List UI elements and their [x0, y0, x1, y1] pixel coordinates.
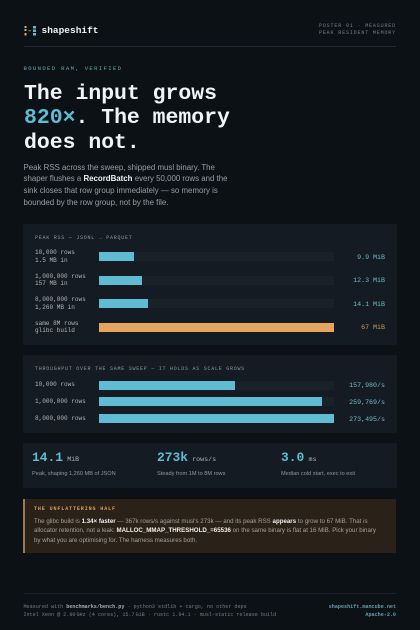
row: 1,000,000 rows [35, 397, 385, 406]
row: 1,000,000 rows: 1,000,000 rows 157 MB in [35, 272, 86, 287]
panel title: PEAK RSS — JSONL → PARQUET [35, 234, 133, 240]
intro paragraph: Peak RSS across the sweep, shipped musl binary. The [24, 162, 215, 172]
poster meta: POSTER 01 · MEASURED PEAK RESIDENT MEMORY [319, 22, 396, 36]
row: 1,000,000 rows: 12.3 MiB [353, 276, 385, 284]
panel: peak RSS chart [23, 224, 397, 344]
callout title: THE UNFLATTERING HALF [34, 506, 116, 512]
row: 8,000,000 rows: 14.1 MiB [353, 300, 385, 308]
row: 10,000 rows: 10,000 rows 1.5 MB in [35, 249, 75, 264]
eyebrow: BOUNDED RAM, VERIFIED [24, 65, 122, 72]
brand name: shapeshift [42, 24, 99, 36]
callout: the unflattering half [23, 499, 396, 553]
icon: logo [24, 26, 36, 36]
intro paragraph: shaper flushes a RecordBatch every 50,000 rows and the [24, 174, 228, 183]
stat: cold start: Median cold start, exec to exit [281, 470, 355, 476]
intro paragraph: bounded by the row group, not by the file. [24, 198, 168, 207]
row: 8,000,000 rows [35, 414, 385, 423]
row: 10,000 rows [35, 249, 385, 264]
stat: throughput: 273k rows/s [157, 450, 216, 465]
header [24, 20, 396, 47]
title: The input grows 820×. The memory does not. [24, 82, 230, 155]
callout text: allocator retention, not a leak: MALLOC_MMAP_THRESHOLD_=65536 on the same binary is flat at 16 MiB. Pick your binary [34, 527, 376, 534]
row: 10,000 rows [35, 381, 385, 390]
callout text: The glibc build is 1.34× faster — 367k rows/s against musl's 273k — and its peak RSS appears to grow to 67 MiB. That is [34, 518, 368, 524]
row: 8,000,000 rows: 8,000,000 rows [35, 414, 86, 422]
row: glibc build: same 8M rows glibc build [35, 320, 79, 334]
intro paragraph: sink closes that row group immediately — so memory is [24, 186, 218, 195]
row: 10,000 rows: 9.9 MiB [357, 252, 385, 260]
row: 10,000 rows: 157,980/s [349, 381, 385, 389]
row: 1,000,000 rows [35, 272, 385, 287]
stat: peak memory: 14.1 MiB [32, 450, 79, 465]
panel: throughput chart [23, 355, 397, 433]
row: 1,000,000 rows: 1,000,000 rows [35, 398, 86, 405]
callout text: by what you are optimising for. The harness measures both. [34, 536, 197, 544]
panel title: THROUGHPUT OVER THE SAME SWEEP — IT HOLDS AS SCALE GROWS [35, 366, 245, 372]
footer notes: Measured with benchmarks/bench.py · python3 stdlib + cargo, no other deps Intel Xeon @ 2.80GHz (4 cores), 15.7GiB · rustc 1.94.1 · musl-static release build [24, 604, 276, 618]
row: 8,000,000 rows [35, 296, 385, 311]
stat: throughput: Steady from 1M to 8M rows [157, 470, 225, 476]
footer [24, 593, 396, 621]
row: 1,000,000 rows: 259,769/s [349, 398, 385, 406]
stat: throughput [157, 450, 226, 476]
row: 8,000,000 rows: 273,495/s [349, 414, 385, 422]
stat: cold start: 3.0 ms [281, 450, 316, 465]
row: 10,000 rows: 10,000 rows [35, 381, 75, 388]
intro paragraph [24, 162, 228, 207]
stat: peak memory: Peak, shaping 1,260 MB of JSON [32, 470, 116, 476]
stat: peak memory [32, 450, 116, 476]
row: glibc build [35, 320, 385, 334]
footer links: shapeshift.mancube.net Apache-2.0 [329, 604, 396, 618]
callout text [34, 518, 376, 544]
panel: key stats [23, 443, 397, 488]
row: glibc build: 67 MiB [361, 323, 385, 331]
stat: cold start [281, 450, 355, 476]
row: 8,000,000 rows: 8,000,000 rows 1,260 MB in [35, 296, 86, 311]
